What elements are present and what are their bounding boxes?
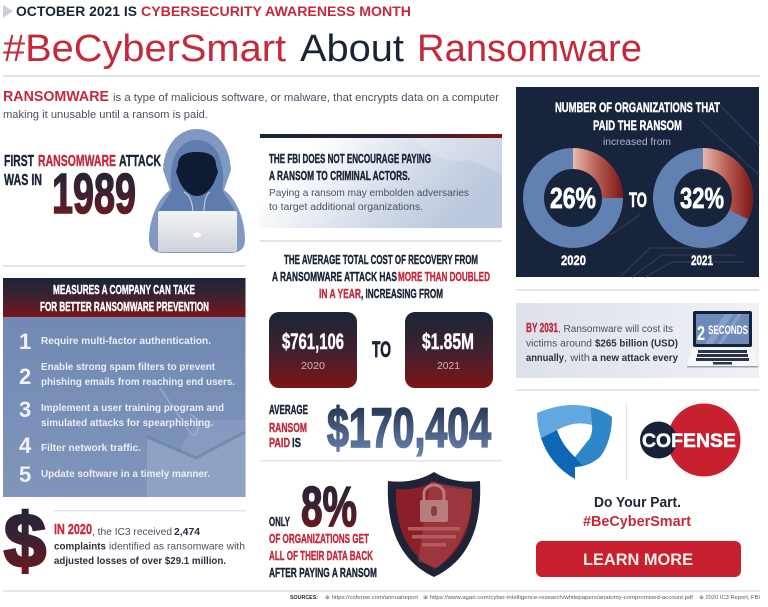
measure 3: 3: [19, 397, 31, 422]
IC3 complaints text: adjusted losses of over $29.1 million.: [54, 555, 226, 567]
first ransomware attack: 1989: [52, 162, 136, 226]
average ransom paid: $170,404: [327, 396, 491, 459]
stat card: 2021 cost: $1.85M: [422, 329, 474, 354]
panel: by 2031: $265 billion (USD): [595, 338, 678, 350]
IC3 complaints text: complaints: [54, 540, 106, 552]
8% of organizations: AFTER PAYING A RANSOM: [269, 565, 377, 580]
sources: ⊕ https://cofense.com/annualreport: [325, 595, 418, 601]
icon: dollar sign: $: [4, 499, 46, 584]
panel: FBI notice: THE FBI DOES NOT ENCOURAGE PAYING: [269, 152, 431, 166]
IC3 complaints text: IN 2020: [54, 521, 92, 538]
measure 5: Update software in a timely manner.: [41, 468, 210, 480]
button: learn more: LEARN MORE: [583, 550, 693, 569]
header kicker: CYBERSECURITY AWARENESS MONTH: [141, 4, 411, 19]
laptop: [158, 211, 237, 252]
8% of organizations: ALL OF THEIR DATA BACK: [269, 548, 373, 563]
IC3 complaints text: 2,474: [174, 526, 200, 538]
heading: average recovery cost: A RANSOMWARE ATTACK HAS: [272, 269, 397, 284]
ransomware definition: making it unusable until a ransom is paid.: [3, 109, 208, 121]
measure 4: Filter network traffic.: [41, 442, 141, 454]
header kicker: OCTOBER 2021 IS: [16, 4, 137, 19]
logo: partner shield: [537, 405, 612, 479]
panel header: [3, 278, 246, 317]
measure 1: [19, 329, 211, 354]
panel: by 2031: BY 2031: [526, 321, 558, 335]
ransomware definition: RANSOMWARE: [3, 89, 109, 105]
first ransomware attack: [4, 153, 161, 226]
average ransom paid: PAID: [269, 435, 290, 450]
measure 3: [19, 397, 224, 429]
measure 4: [19, 433, 141, 458]
8% of organizations: 8%: [301, 475, 357, 539]
panel: organizations that paid: [516, 87, 759, 277]
donut chart: 2021: 2021: [691, 252, 713, 268]
title: #BeCyberSmart: [3, 28, 286, 70]
title: [3, 28, 642, 70]
button: learn more: [536, 541, 741, 577]
8% of organizations: OF ORGANIZATIONS GET: [269, 531, 369, 546]
call to action text: [583, 495, 691, 530]
heading: average recovery cost: [272, 252, 490, 301]
logo: Cofense: [640, 404, 740, 476]
panel: organizations that paid: PAID THE RANSOM: [593, 118, 682, 133]
measure 5: 5: [19, 462, 31, 487]
stat card: 2021 cost: 2021: [437, 361, 460, 372]
panel: by 2031: , Ransomware will cost its: [558, 324, 673, 335]
call to action text: Do Your Part.: [594, 495, 681, 511]
average ransom paid: RANSOM: [269, 420, 307, 435]
heading: average recovery cost: THE AVERAGE TOTAL COST OF RECOVERY FROM: [284, 252, 478, 267]
IC3 complaints text: identified as ransomware with: [109, 540, 245, 552]
ransomware definition: [3, 89, 499, 121]
measure 5: [19, 462, 210, 487]
panel: by 2031: victims around: [526, 338, 592, 350]
donut chart: 2021: [664, 148, 753, 268]
label: to: TO: [372, 337, 391, 362]
panel: FBI notice: Paying a ransom may embolden adversaries: [269, 187, 469, 199]
icon: laptop showing 2 seconds: SECONDS: [708, 325, 748, 337]
measure 2: 2: [19, 364, 31, 389]
measure 2: [19, 361, 235, 389]
measure 4: 4: [19, 433, 32, 458]
panel: organizations that paid: increased from: [603, 137, 671, 148]
header kicker: [3, 4, 411, 19]
measure 2: Enable strong spam filters to prevent: [41, 361, 215, 373]
sources: [290, 595, 760, 601]
panel: FBI notice: A RANSOM TO CRIMINAL ACTORS.: [269, 169, 410, 183]
measure 1: 1: [19, 329, 31, 354]
stat card: 2020 cost: 2020: [301, 361, 325, 372]
donut chart: 2020: [534, 148, 623, 268]
label: to: TO: [629, 189, 647, 212]
average ransom paid: IS: [292, 435, 301, 450]
sources: ⊕ https://www.agari.com/cyber-intelligence-research/whitepapers/anatomy-compromised-account.pdf: [423, 595, 694, 601]
panel: by 2031: , with: [564, 353, 590, 364]
panel: FBI notice: [260, 134, 502, 228]
stat card: 2020 cost: $761,106: [282, 329, 344, 354]
IC3 complaints text: , the IC3 received: [92, 526, 172, 538]
stat card: 2020 cost: [269, 312, 357, 388]
measure 3: Implement a user training program and: [41, 402, 224, 414]
icon: arrow marker: [3, 5, 13, 18]
title: About: [300, 28, 404, 70]
heading: average recovery cost: , INCREASING FROM: [361, 286, 443, 301]
first ransomware attack: FIRST: [4, 153, 34, 170]
ransomware definition: is a type of malicious software, or malware, that encrypts data on a computer: [113, 92, 499, 104]
8% of organizations: [269, 475, 377, 580]
heading: average recovery cost: IN A YEAR: [319, 286, 361, 301]
panel: prevention measures: [3, 278, 246, 497]
first ransomware attack: ATTACK: [119, 153, 161, 170]
panel header: MEASURES A COMPANY CAN TAKE: [53, 282, 195, 297]
panel: by 2031: annually: [526, 353, 564, 364]
heading: average recovery cost: MORE THAN DOUBLED: [398, 269, 490, 284]
title: Ransomware: [417, 28, 642, 70]
measure 2: phishing emails from reaching end users.: [41, 376, 235, 388]
first ransomware attack: RANSOMWARE: [38, 153, 116, 170]
panel: by 2031: [516, 303, 759, 378]
decorative: envelope with hook: [147, 388, 245, 497]
sources: SOURCES:: [290, 595, 318, 601]
measure 1: Require multi-factor authentication.: [41, 335, 211, 347]
logo: Cofense: COFENSE: [642, 430, 736, 452]
panel: FBI notice: to target additional organizations.: [269, 201, 423, 213]
donut chart: 2020: 26%: [550, 183, 596, 215]
donut chart: 2021: 32%: [680, 183, 724, 215]
first ransomware attack: WAS IN: [4, 172, 42, 189]
sources: ⊕ 2020 IC3 Report, FBI: [699, 595, 760, 601]
icon: locked shield: [388, 472, 480, 577]
8% of organizations: ONLY: [269, 514, 290, 529]
average ransom paid: AVERAGE: [269, 402, 308, 417]
average ransom paid: [269, 396, 491, 459]
icon: laptop showing 2 seconds: 2: [697, 323, 705, 345]
panel header: FOR BETTER RANSOMWARE PREVENTION: [40, 299, 209, 314]
IC3 complaints text: [54, 521, 245, 567]
stat card: 2021 cost: [405, 312, 493, 388]
measure 3: simulated attacks for spearphishing.: [41, 417, 213, 429]
donut chart: 2020: 2020: [561, 252, 586, 268]
call to action text: #BeCyberSmart: [583, 514, 691, 530]
icon: hooded hacker at laptop: [149, 129, 245, 253]
panel: by 2031: a new attack every: [592, 353, 678, 364]
icon: laptop showing 2 seconds: [687, 311, 758, 368]
